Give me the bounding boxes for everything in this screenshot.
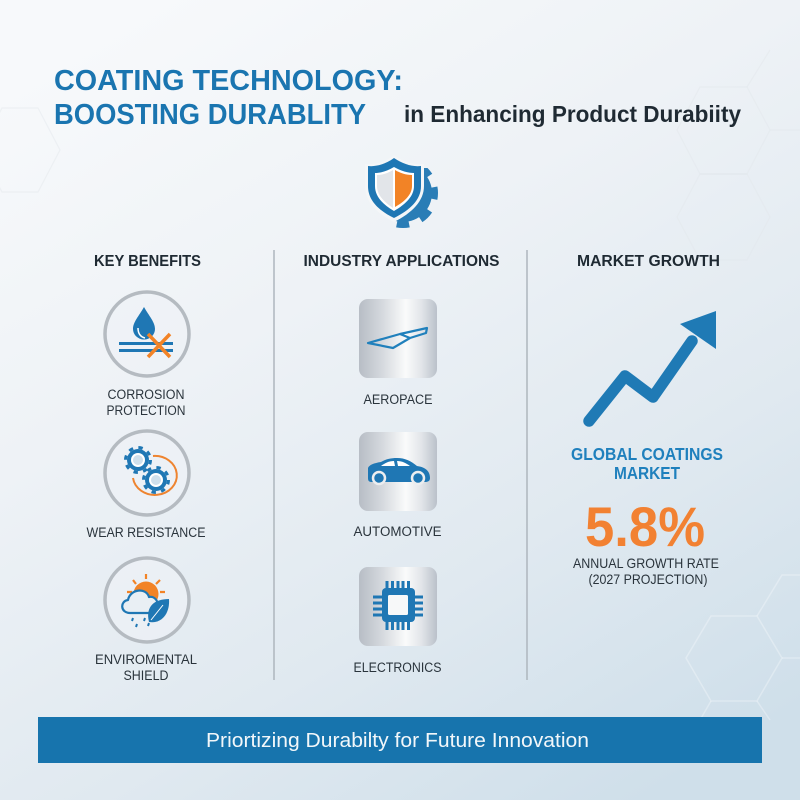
icon: wear resistance xyxy=(105,431,189,515)
icon: shield and gear xyxy=(365,155,434,224)
heading: global coatings market: MARKET xyxy=(614,463,680,483)
column dividers xyxy=(274,250,527,680)
label: annual growth rate: ANNUAL GROWTH RATE xyxy=(573,555,719,571)
panel: market growth xyxy=(571,311,723,587)
footer banner xyxy=(38,717,762,763)
icon: environmental shield xyxy=(105,558,189,642)
heading: global coatings market: GLOBAL COATINGS xyxy=(571,444,723,464)
label: corrosion protection: CORROSION xyxy=(108,387,184,402)
label: electronics: ELECTRONICS xyxy=(354,660,442,675)
label: environmental shield xyxy=(95,652,197,683)
label: annual growth rate: (2027 PROJECTION) xyxy=(588,571,708,587)
label: annual growth rate xyxy=(573,555,719,587)
stat: growth rate: 5.8% xyxy=(585,495,705,558)
heading: industry applications: INDUSTRY APPLICATIONS xyxy=(304,253,500,270)
heading: market growth: MARKET GROWTH xyxy=(577,253,720,270)
title: COATING TECHNOLOGY: xyxy=(54,65,403,97)
tile: automotive xyxy=(359,432,437,511)
label: environmental shield: SHIELD xyxy=(124,668,169,683)
label: corrosion protection: PROTECTION xyxy=(106,403,186,418)
icon: corrosion protection xyxy=(105,292,189,376)
title: BOOSTING DURABLITY xyxy=(54,99,366,131)
panel: key benefits xyxy=(86,292,206,683)
tile: aerospace xyxy=(359,299,437,378)
panel: industry applications xyxy=(354,299,442,675)
label: aerospace: AEROPACE xyxy=(364,392,432,407)
label: wear resistance: WEAR RESISTANCE xyxy=(86,525,206,540)
icon: growth arrow xyxy=(589,311,716,421)
heading: global coatings market xyxy=(571,444,723,483)
title xyxy=(54,65,403,131)
footer banner: Priortizing Durabilty for Future Innovation xyxy=(206,730,589,752)
label: automotive: AUTOMOTIVE xyxy=(354,524,442,539)
tile: electronics xyxy=(359,567,437,646)
label: corrosion protection xyxy=(106,387,186,418)
label: environmental shield: ENVIROMENTAL xyxy=(95,652,197,667)
subtitle: in Enhancing Product Durabiity xyxy=(404,101,741,127)
heading: key benefits: KEY BENEFITS xyxy=(94,253,201,270)
